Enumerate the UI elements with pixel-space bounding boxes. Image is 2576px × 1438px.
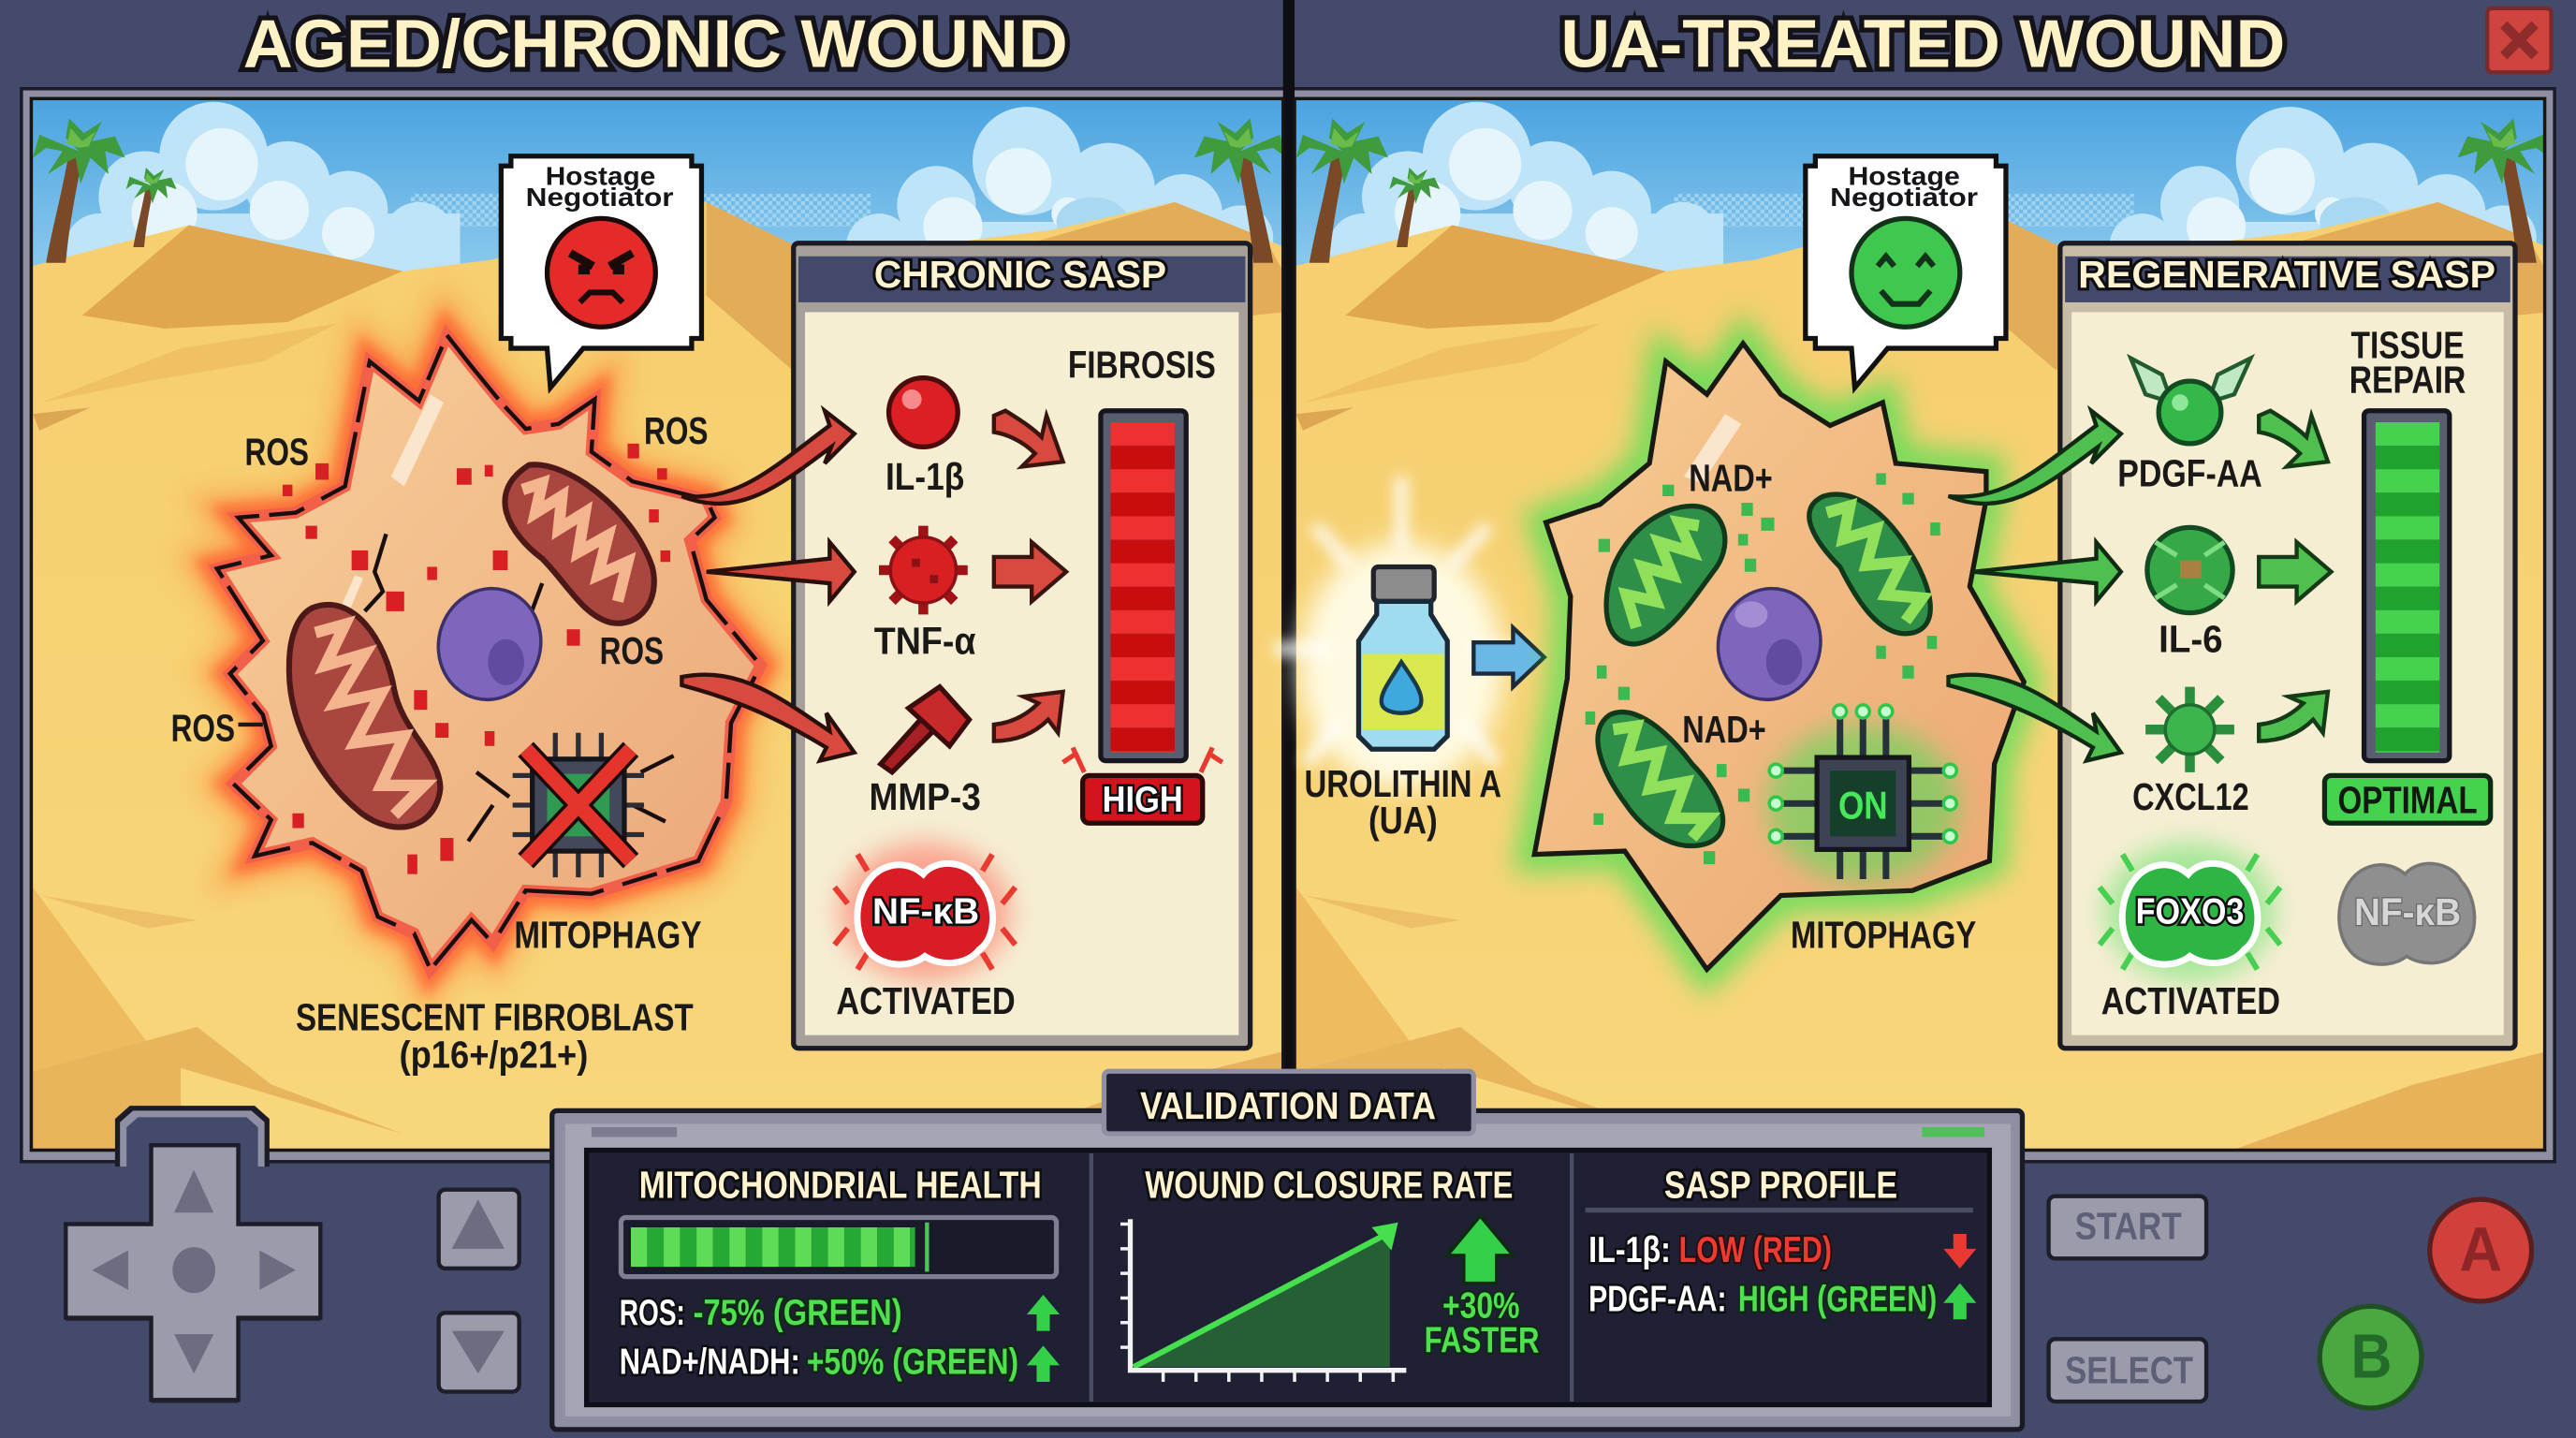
label: TNF-alpha: TNF-α [874,619,976,662]
heading: chronic SASP: CHRONIC SASP [874,253,1166,296]
urolithin A bottle [1273,477,1528,788]
speech bubble: angry negotiator [501,156,701,388]
arrow: cell to TNF-alpha [707,542,855,601]
mitophagy chip blocked [513,733,644,877]
label: activated right: ACTIVATED [2101,979,2280,1022]
label: fibrosis: FIBROSIS [1068,344,1216,387]
title: aged chronic wound: AGED/CHRONIC WOUND [243,7,1068,81]
badge: high [1063,748,1222,823]
nucleus [1705,577,1833,712]
scene: right desert background [1295,98,2550,1151]
small arrow: IL-1 to fibrosis [994,411,1063,466]
ROS labels [171,409,708,749]
speech bubble: happy negotiator: Negotiator [1830,183,1978,212]
icon: FOXO3 activated: FOXO3 [2136,892,2244,932]
label: NAD+ upper: NAD+ [1689,457,1773,500]
label: urolithin A: UROLITHIN A [1305,762,1501,805]
icon: MMP-3 hammer [881,687,970,772]
bar: fibrosis level [1101,411,1186,761]
speech bubble: angry negotiator: Hostage [546,161,655,190]
label: IL-1 beta: IL-1β [886,455,964,498]
title: UA-treated wound: UA-TREATED WOUND [1560,7,2285,81]
metric: NAD: +50% (GREEN) [807,1342,1018,1382]
heading tab [1104,1071,1473,1134]
mitochondrion damaged lower [289,605,440,828]
metric: ROS: -75% (GREEN) [694,1293,902,1333]
panel frame: right screen [1292,89,2554,1162]
mitochondrion healthy 3 [1598,712,1723,845]
button: select: SELECT [2065,1349,2193,1392]
metric: NAD: NAD+/NADH: [620,1342,800,1382]
arrow: cell to PDGF-AA [1949,411,2121,504]
arrow: cell to IL-6 [1973,542,2121,601]
heading tab: VALIDATION DATA [1140,1084,1436,1127]
ROS labels: ROS [171,706,235,749]
panel frame: left screen [22,89,1286,1162]
label: urolithin A: (UA) [1368,799,1438,842]
label: senescent fibroblast [296,995,694,1077]
panel: validation data [552,1071,2022,1430]
button: start [2049,1196,2206,1258]
metric: ROS: ROS: [620,1293,685,1333]
button: start: START [2075,1204,2182,1247]
screen inner outline left [31,98,1283,1151]
regenerating fibroblast cell [1534,344,2024,969]
nucleus [426,577,553,712]
small arrow: MMP to fibrosis [994,692,1063,741]
heading: regenerative SASP: REGENERATIVE SASP [2078,253,2496,296]
ROS labels: ROS [644,409,708,452]
icon: PDGF-AA winged [2130,359,2250,444]
label: MMP-3: MMP-3 [869,775,981,818]
button: select [2049,1339,2206,1401]
mitochondrion healthy 2 [1809,494,1930,634]
mitochondrion healthy 1 [1606,506,1725,644]
label: NAD+ lower: NAD+ [1682,708,1766,751]
metric: IL-1 beta low [1588,1230,1976,1270]
icon: angry face [547,218,655,327]
label: CXCL12: CXCL12 [2132,775,2249,818]
button: A [2430,1199,2532,1301]
metric: PDGF-AA high: HIGH (GREEN) [1738,1280,1937,1320]
button: B [2320,1306,2422,1408]
icon: IL-6 [2147,527,2232,613]
icon: TNF-alpha [879,526,968,614]
indicator lights [1922,1127,1984,1137]
ROS specks [283,444,670,874]
section: mitochondrial health [620,1163,1060,1382]
badge: high: HIGH [1103,780,1183,820]
arrow: cell to CXCL12 [1949,675,2121,761]
center divider [1283,0,1295,1084]
small arrow: TNF to fibrosis [994,542,1066,601]
senescent fibroblast cell [217,335,761,969]
label: urolithin A [1305,762,1501,842]
button: B: B [2351,1323,2392,1392]
label: tissue repair: REPAIR [2349,358,2466,401]
icon: IL-1 beta [889,378,958,447]
mitophagy chip on: ON [1838,783,1888,827]
section: SASP profile [1586,1163,1976,1320]
indicator marks [592,1127,677,1137]
line chart [1120,1219,1406,1382]
icon: up arrow [1447,1216,1513,1284]
callout: faster [1425,1286,1540,1361]
label: senescent fibroblast: (p16+/p21+) [400,1034,588,1077]
arrow: cell to MMP-3 [681,675,855,761]
label: mitophagy right: MITOPHAGY [1791,914,1976,957]
badge: optimal: OPTIMAL [2337,779,2478,822]
icon: CXCL12 [2145,687,2234,772]
panel header [798,257,1245,302]
mitochondrion damaged upper [505,464,654,624]
icon: happy face [1852,218,1960,327]
d-pad [66,1145,320,1403]
speech bubble: angry negotiator: Negotiator [526,183,674,212]
small arrow: CXCL12 to repair [2259,692,2328,741]
section: wound closure rate [1120,1163,1540,1382]
arrow: urolithin to cell [1473,627,1544,687]
screen inner outline right [1295,98,2545,1151]
metric: PDGF-AA high [1588,1280,1976,1320]
icon: NF-kB activated: NF-κB [872,892,979,932]
label: IL-6: IL-6 [2159,618,2223,661]
speech bubble: happy negotiator [1806,156,2006,388]
icon: NF-kB activated [835,843,1016,981]
panel body [2071,312,2504,1035]
mitophagy chip on [1767,705,1958,882]
label: tissue repair: TISSUE [2351,324,2465,367]
icon: FOXO3 activated [2100,843,2280,981]
section: SASP profile: SASP PROFILE [1664,1163,1897,1206]
small arrow: IL-6 to repair [2259,542,2331,601]
label: activated left: ACTIVATED [836,979,1016,1022]
icon: close button [2487,8,2552,72]
icon: NF-kB inactive [2339,863,2475,964]
label: tissue repair [2349,324,2466,401]
section: mitochondrial health: MITOCHONDRIAL HEALTH [639,1163,1042,1206]
button: down [439,1313,520,1392]
speech bubble: happy negotiator: Hostage [1848,161,1960,190]
label: senescent fibroblast: SENESCENT FIBROBLAST [296,995,694,1038]
panel: regenerative SASP [2060,243,2515,1049]
small arrow: PDGF to repair [2259,411,2328,466]
panel: chronic SASP [794,243,1251,1049]
label: mitophagy left: MITOPHAGY [514,914,702,957]
button: up [439,1190,520,1269]
panel header [2065,257,2510,302]
health bar [621,1217,1057,1277]
metric: IL-1 beta low: LOW (RED) [1679,1230,1832,1270]
icon: NF-kB inactive: NF-κB [2354,890,2461,933]
label: PDGF-AA: PDGF-AA [2117,451,2262,494]
NAD+ sparkles [1586,473,1940,864]
metric: PDGF-AA high: PDGF-AA: [1588,1280,1727,1320]
screen [587,1151,1989,1405]
panel body [805,312,1238,1035]
callout: faster: FASTER [1425,1321,1540,1361]
metric: IL-1 beta low: IL-1β: [1588,1230,1671,1270]
callout: faster: +30% [1442,1286,1519,1327]
metric: NAD [620,1342,1060,1382]
scene: left desert background [31,98,1286,1151]
arrow: cell to IL-1 beta [681,411,855,504]
section: wound closure rate: WOUND CLOSURE RATE [1145,1163,1513,1206]
ROS labels: ROS [600,629,664,672]
d-pad housing notch [115,1106,270,1170]
ROS labels: ROS [245,431,309,474]
button: A: A [2459,1216,2502,1285]
bar: tissue repair level [2364,411,2450,761]
metric: ROS [620,1293,1060,1333]
